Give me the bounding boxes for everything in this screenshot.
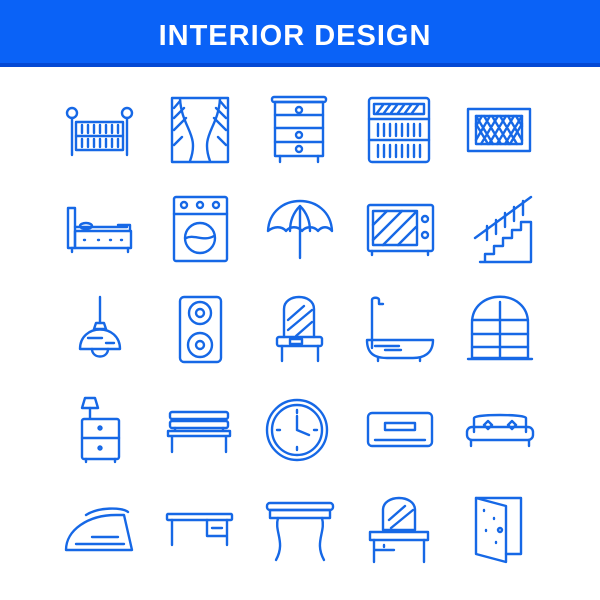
icon: side table [267,503,333,560]
header banner [0,0,600,67]
icon: wall clock [267,400,327,460]
icon: washing machine [174,197,227,261]
icon: speaker [180,297,221,362]
icon: nightstand with lamp [82,398,119,462]
icon: sofa [467,415,533,446]
icon: crib [67,108,132,155]
icon: air conditioner [368,413,432,446]
icon: door [476,498,521,562]
icon: bench [168,412,230,452]
title: INTERIOR DESIGN [159,20,431,52]
icon: bathtub [367,298,433,361]
icon: umbrella [268,201,332,258]
icon: iron [66,509,132,550]
icon: curtains [172,98,228,162]
icon: microwave [368,205,433,255]
icon: rug [468,109,530,151]
icon: dressing table [370,498,428,562]
icon: vanity chair [277,297,322,361]
icon: dresser [272,97,326,162]
icon: bookshelf [369,98,429,162]
icon: pendant lamp [80,297,120,356]
icon: desk [167,514,232,545]
icon: bed [68,208,131,252]
icon: stairs [475,197,531,262]
icon: arched window [468,297,532,359]
